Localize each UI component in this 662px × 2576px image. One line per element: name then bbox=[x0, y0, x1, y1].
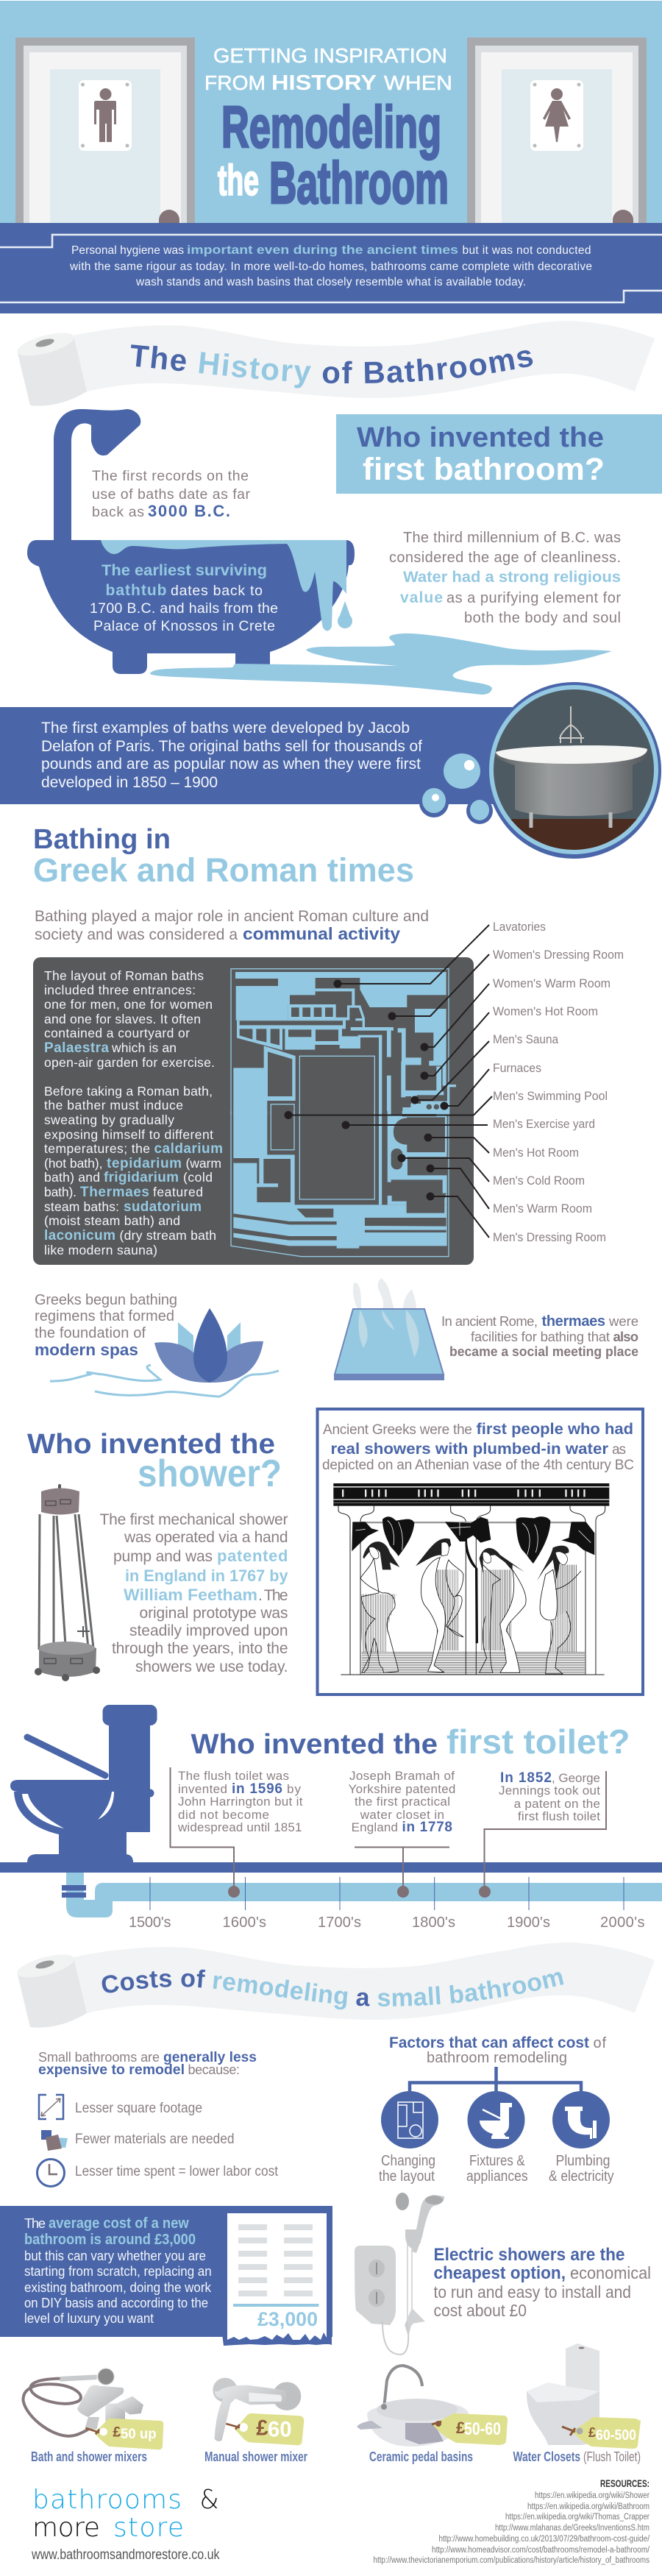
timeline labels bbox=[129, 1915, 644, 1931]
text: average cost: level of luxury you want bbox=[24, 2310, 154, 2326]
floor plan leader lines bbox=[284, 925, 492, 1238]
product: ceramic pedal basin bbox=[357, 2366, 508, 2464]
text: small bathrooms: because: bbox=[188, 2062, 240, 2077]
text: third millennium: The third millennium of B.C. was bbox=[403, 530, 621, 546]
text: joseph bramah 1778: water closet in bbox=[360, 1808, 444, 1822]
text: communal activity: society and was considered a bbox=[35, 926, 238, 943]
title: the bbox=[218, 157, 259, 205]
floor plan labels: Men's Exercise yard bbox=[493, 1118, 595, 1131]
text: layout description: contained a courtyard or bbox=[44, 1026, 190, 1040]
band: first examples of baths: The first examples of baths were developed by Jacob bbox=[41, 720, 410, 737]
heading: costs of remodeling a small bathroom: Costs of remodeling a small bathroom bbox=[102, 1969, 563, 2010]
photo: freestanding bath in oval bbox=[485, 682, 662, 859]
product: water closet: Water Closets bbox=[513, 2449, 580, 2464]
title: GETTING INSPIRATION bbox=[213, 44, 447, 67]
text: george jennings 1852: a patent on the bbox=[514, 1797, 600, 1811]
text: layout description: exposing himself to different bbox=[44, 1127, 213, 1142]
factors heading: bathroom remodeling bbox=[427, 2050, 567, 2066]
illustration: mechanical shower bbox=[35, 1484, 100, 1681]
text: joseph bramah 1778: the first practical bbox=[355, 1795, 450, 1809]
text: average cost bbox=[24, 2215, 212, 2326]
text: mechanical shower: The first mechanical shower bbox=[100, 1511, 288, 1528]
text: average cost: on DIY basis and according to the bbox=[24, 2295, 208, 2310]
floor plan labels: Men's Sauna bbox=[493, 1033, 559, 1046]
text: ancient greeks: real showers with plumbed-in water bbox=[331, 1441, 608, 1458]
floor plan labels: Men's Warm Room bbox=[493, 1202, 592, 1216]
item: lesser time spent bbox=[37, 2159, 279, 2187]
text: flush toilet 1596: did not become bbox=[178, 1808, 269, 1822]
heading: who invented the shower: shower? bbox=[138, 1452, 282, 1495]
text: flush toilet 1596: John Harrington but it bbox=[178, 1795, 303, 1809]
left door: men bbox=[15, 38, 195, 223]
text: joseph bramah 1778: England bbox=[352, 1820, 398, 1834]
text: electric showers bbox=[434, 2245, 651, 2320]
text: thermaes bbox=[441, 1313, 638, 1359]
text: layout description: (moist steam bath) and bbox=[44, 1213, 180, 1228]
timeline labels: 1500's bbox=[129, 1915, 171, 1931]
text: mechanical shower: . The bbox=[258, 1587, 288, 1604]
text: mechanical shower: pump and was bbox=[113, 1548, 213, 1565]
floor plan labels bbox=[493, 920, 624, 1244]
text: layout description: (dry stream bath bbox=[119, 1228, 216, 1243]
floor plan bbox=[231, 969, 456, 1257]
text: mechanical shower: was operated via a hand bbox=[124, 1529, 288, 1546]
resources bbox=[374, 2477, 650, 2565]
timeline labels: 1700's bbox=[318, 1915, 361, 1931]
text: flush toilet 1596: widespread until 1851 bbox=[177, 1820, 302, 1834]
text: layout description: sudatorium bbox=[124, 1199, 202, 1215]
factors heading: of bbox=[593, 2035, 606, 2051]
panel: athenian vase bbox=[318, 1409, 643, 1695]
product: bath and shower mixer bbox=[24, 2369, 163, 2464]
text: third millennium: as a purifying element for bbox=[446, 590, 621, 606]
intro text bbox=[69, 243, 592, 288]
text: mechanical shower: steadily improved upon bbox=[129, 1622, 288, 1639]
text: ancient greeks: as bbox=[612, 1442, 626, 1458]
product: bath and shower mixer: 50 up bbox=[121, 2427, 157, 2442]
text: average cost: The bbox=[24, 2215, 46, 2231]
figure robes bbox=[361, 1594, 396, 1652]
heading: who invented the first toilet: first toilet? bbox=[446, 1722, 630, 1761]
text: mechanical shower bbox=[100, 1511, 288, 1675]
band: first examples of baths: pounds and are as popular now as when they were first bbox=[41, 756, 421, 773]
bubbles bbox=[419, 753, 493, 824]
text: george jennings 1852: Jennings took out bbox=[499, 1784, 600, 1798]
text: average cost: but this can vary whether you are bbox=[24, 2248, 206, 2263]
factors tree connector bbox=[410, 2067, 581, 2091]
text: layout description: like modern sauna) bbox=[44, 1243, 157, 1257]
text: earliest bathtub: dates back to bbox=[171, 583, 263, 599]
product: water closet bbox=[513, 2343, 641, 2464]
title: Remodeling bbox=[221, 94, 441, 160]
factor: fixtures and appliances: Fixtures & bbox=[469, 2153, 525, 2169]
factor: changing the layout: Changing bbox=[381, 2153, 435, 2169]
text: first records bbox=[92, 468, 250, 520]
toilet icon bbox=[10, 1705, 157, 1862]
text: george jennings 1852: , George bbox=[552, 1771, 600, 1785]
timeline labels: 1600's bbox=[222, 1915, 266, 1931]
text: third millennium: considered the age of cleanliness. bbox=[389, 550, 621, 566]
text: flush toilet 1596: The flush toilet was bbox=[178, 1769, 289, 1783]
intro band bbox=[0, 223, 662, 313]
text: thermaes: were bbox=[608, 1313, 638, 1329]
floor plan labels: Men's Hot Room bbox=[493, 1146, 579, 1160]
text: joseph bramah 1778 bbox=[349, 1769, 455, 1835]
text: layout description: bath) and bbox=[44, 1170, 100, 1185]
illustration: vase painting bbox=[333, 1483, 609, 1675]
text: average cost: bathroom is around £3,000 bbox=[24, 2232, 196, 2248]
logo: more bbox=[32, 2513, 100, 2543]
text: flush toilet 1596: invented bbox=[178, 1782, 227, 1796]
text: greeks modern spas: the foundation of bbox=[35, 1325, 146, 1341]
text: layout description: The layout of Roman baths bbox=[44, 968, 204, 983]
text: ancient greeks: depicted on an Athenian vase of the 4th century BC bbox=[322, 1458, 634, 1473]
text: layout description: and one for slaves. It often bbox=[44, 1012, 201, 1026]
icon: lotus bbox=[50, 1308, 279, 1397]
text: layout description: caldarium bbox=[154, 1141, 223, 1157]
panel: average cost bbox=[0, 2206, 332, 2346]
text: layout description: the bather must induce bbox=[44, 1098, 183, 1113]
title bbox=[204, 44, 452, 216]
factor: changing the layout: the layout bbox=[379, 2168, 435, 2185]
title: HISTORY bbox=[271, 71, 377, 95]
text: george jennings 1852: first flush toilet bbox=[518, 1809, 600, 1823]
text: electric showers: cheapest option, bbox=[434, 2263, 566, 2283]
product: manual shower mixer: £ bbox=[256, 2416, 268, 2440]
factor: changing the layout bbox=[379, 2091, 438, 2185]
panel: who invented the first bathroom: Who invented the bbox=[357, 422, 604, 453]
text: mechanical shower: William Feetham bbox=[124, 1586, 257, 1604]
item: lesser square footage bbox=[39, 2095, 202, 2119]
text: small bathrooms: generally less bbox=[163, 2050, 257, 2065]
title: FROM bbox=[204, 71, 266, 94]
text: layout description: tepidarium bbox=[107, 1156, 182, 1171]
product: ceramic pedal basin: £ bbox=[456, 2419, 466, 2437]
text: communal activity bbox=[35, 908, 429, 943]
text: electric showers: economical bbox=[570, 2263, 651, 2282]
factor: fixtures and appliances bbox=[466, 2091, 528, 2185]
product: manual shower mixer: Manual shower mixer bbox=[204, 2449, 307, 2464]
text: george jennings 1852: In 1852 bbox=[500, 1770, 552, 1786]
text: earliest bathtub: The earliest surviving bbox=[102, 562, 267, 579]
intro text: important even during the ancient times bbox=[187, 243, 458, 257]
product: manual shower mixer: 60 bbox=[268, 2418, 292, 2442]
heading: bathing in greek and roman times bbox=[33, 824, 414, 889]
intro text: wash stands and wash basins that closely resemble what is available today. bbox=[135, 276, 526, 288]
receipt bbox=[227, 2213, 327, 2341]
text: first records: The first records on the bbox=[92, 468, 249, 484]
logo: bathrooms bbox=[32, 2485, 182, 2515]
text: flush toilet 1596 bbox=[177, 1769, 303, 1834]
text: third millennium: Water had a strong religious bbox=[403, 569, 621, 586]
factors heading: Factors that can affect cost bbox=[389, 2034, 589, 2051]
text: layout description: Thermaes bbox=[80, 1185, 149, 1200]
bathtub illustration bbox=[27, 409, 355, 674]
floor plan labels: Men's Dressing Room bbox=[493, 1231, 606, 1244]
banner: costs of remodeling bbox=[18, 1942, 655, 2028]
text: layout description: (hot bath), bbox=[44, 1156, 103, 1171]
text: layout description: Before taking a Roman bath, bbox=[44, 1084, 213, 1099]
hero background bbox=[0, 1, 662, 224]
text: greeks modern spas: modern spas bbox=[35, 1341, 138, 1359]
text: mechanical shower: through the years, into the bbox=[112, 1640, 288, 1657]
text: greeks modern spas: Greeks begun bathing bbox=[35, 1292, 177, 1308]
text: small bathrooms bbox=[38, 2050, 257, 2078]
text: average cost: average cost of a new bbox=[49, 2215, 189, 2232]
text: ancient greeks bbox=[322, 1421, 634, 1473]
product: ceramic pedal basin: 50-60 bbox=[464, 2419, 501, 2439]
heading: bathing in greek and roman times: Greek and Roman times bbox=[33, 851, 414, 889]
text: flush toilet 1596: in 1596 bbox=[232, 1781, 282, 1797]
floor plan labels: Men's Swimming Pool bbox=[493, 1090, 608, 1103]
text: layout description: included three entrances: bbox=[44, 983, 196, 998]
text: ancient greeks: first people who had bbox=[477, 1421, 633, 1438]
text: greeks modern spas: regimens that formed bbox=[35, 1308, 174, 1324]
text: layout description: frigidarium bbox=[104, 1170, 179, 1185]
text: joseph bramah 1778: in 1778 bbox=[402, 1820, 452, 1835]
text: layout description: (warm bbox=[185, 1156, 221, 1171]
intro text: Personal hygiene was bbox=[71, 244, 184, 257]
text: layout description: laconicum bbox=[44, 1228, 115, 1243]
timeline labels: 1900's bbox=[507, 1915, 550, 1931]
item: fewer materials: Fewer materials are needed bbox=[75, 2132, 235, 2147]
logo bbox=[32, 2485, 219, 2543]
text: layout description: Palaestra bbox=[44, 1040, 109, 1056]
title: WHEN bbox=[384, 71, 452, 94]
panel: who invented the first bathroom: first bathroom? bbox=[363, 452, 605, 487]
intro text: but it was not conducted bbox=[462, 244, 591, 257]
text: mechanical shower: original prototype was bbox=[140, 1605, 288, 1622]
text: george jennings 1852 bbox=[499, 1770, 600, 1823]
product: water closet: (Flush Toilet) bbox=[583, 2449, 641, 2464]
text: layout description: which is an bbox=[111, 1040, 177, 1055]
band: first examples of baths: developed in 1850 – 1900 bbox=[41, 774, 218, 791]
floor plan labels: Women's Hot Room bbox=[493, 1005, 598, 1018]
item: lesser time spent: Lesser time spent = lower labor cost bbox=[75, 2164, 279, 2179]
factor: plumbing and electricity bbox=[549, 2091, 614, 2185]
text: flush toilet 1596: by bbox=[287, 1782, 302, 1796]
heading: history of bathrooms: The History of Bathrooms bbox=[131, 344, 533, 388]
text: third millennium: value bbox=[400, 589, 443, 606]
text: third millennium: both the body and soul bbox=[464, 610, 621, 626]
factors heading bbox=[389, 2034, 606, 2066]
floor plan labels: Women's Warm Room bbox=[493, 977, 611, 990]
text: first records: 3000 B.C. bbox=[148, 502, 230, 520]
text: first records: back as bbox=[92, 504, 144, 520]
band: first examples of baths: Delafon of Paris. The original baths sell for thousands of bbox=[41, 738, 422, 755]
text: communal activity: Bathing played a major role in ancient Roman culture and bbox=[35, 908, 429, 925]
text: layout description: temperatures; the bbox=[44, 1141, 150, 1156]
text: joseph bramah 1778: Yorkshire patented bbox=[349, 1782, 455, 1796]
text: layout description: one for men, one for women bbox=[44, 997, 213, 1012]
text: mechanical shower: in England in 1767 by bbox=[125, 1566, 288, 1585]
text: earliest bathtub: Palace of Knossos in Crete bbox=[93, 618, 275, 634]
text: joseph bramah 1778: Joseph Bramah of bbox=[349, 1769, 455, 1783]
product: water closet: 60-500 bbox=[596, 2427, 636, 2444]
illustration: electric shower bbox=[355, 2193, 444, 2355]
floor plan labels: Lavatories bbox=[493, 920, 546, 934]
heading: who invented the first toilet bbox=[191, 1722, 630, 1761]
text: layout description: featured bbox=[153, 1185, 203, 1199]
timeline: pipe and floor bbox=[0, 1767, 662, 1917]
text: mechanical shower: patented bbox=[217, 1547, 288, 1565]
timeline labels: 2000's bbox=[600, 1915, 644, 1931]
logo: store bbox=[113, 2513, 184, 2543]
text: mechanical shower: showers we use today. bbox=[135, 1658, 288, 1675]
text: third millennium bbox=[389, 530, 621, 626]
text: thermaes: also bbox=[613, 1329, 638, 1344]
factor: fixtures and appliances: appliances bbox=[466, 2168, 528, 2185]
text: average cost: starting from scratch, replacing an bbox=[24, 2263, 212, 2279]
text: earliest bathtub bbox=[90, 562, 278, 634]
product: bath and shower mixer: £ bbox=[113, 2425, 121, 2441]
text: average cost: existing bathroom, doing the work bbox=[24, 2279, 212, 2295]
icon: thermae pool with steam bbox=[334, 1278, 444, 1380]
text: earliest bathtub: bathtub bbox=[106, 582, 166, 599]
heading: bathing in greek and roman times: Bathing in bbox=[33, 824, 171, 855]
text: thermaes: facilities for bathing that bbox=[471, 1329, 610, 1344]
text: thermaes: In ancient Rome, bbox=[441, 1313, 538, 1329]
floor plan labels: Men's Cold Room bbox=[493, 1174, 585, 1188]
text: layout description: open-air garden for exercise. bbox=[44, 1055, 215, 1070]
title: Bathroom bbox=[269, 150, 449, 216]
factor: plumbing and electricity: & electricity bbox=[549, 2168, 614, 2185]
heading: who invented the first toilet: Who invented the bbox=[191, 1729, 438, 1760]
panel: roman baths layout bbox=[33, 957, 474, 1265]
item: lesser square footage: Lesser square footage bbox=[75, 2101, 202, 2116]
text: layout description: bath). bbox=[44, 1185, 76, 1199]
text: greeks modern spas bbox=[35, 1292, 177, 1359]
text: electric showers: Electric showers are the bbox=[434, 2245, 625, 2265]
heading: who invented the shower: Who invented the bbox=[27, 1429, 275, 1460]
factor: plumbing and electricity: Plumbing bbox=[556, 2153, 611, 2169]
logo: & bbox=[200, 2485, 219, 2515]
right door: women bbox=[467, 38, 647, 223]
text: communal activity: communal activity bbox=[243, 924, 400, 943]
text: electric showers: cost about £0 bbox=[434, 2301, 527, 2320]
text: first records: use of baths date as far bbox=[92, 486, 250, 503]
item: fewer materials bbox=[41, 2130, 235, 2151]
water puddle bbox=[150, 634, 612, 695]
floor plan labels: Furnaces bbox=[493, 1062, 541, 1075]
receipt: £3,000 bbox=[257, 2308, 318, 2330]
text: layout description: steam baths: bbox=[44, 1199, 119, 1214]
banner: the history of bathrooms bbox=[18, 321, 655, 406]
text: small bathrooms: expensive to remodel bbox=[38, 2062, 185, 2078]
intro text: with the same rigour as today. In more well-to-do homes, bathrooms came complete with decorative bbox=[69, 260, 592, 273]
heading: who invented the shower bbox=[27, 1429, 282, 1495]
product: bath and shower mixer: Bath and shower mixers bbox=[31, 2449, 147, 2464]
product: ceramic pedal basin: Ceramic pedal basins bbox=[369, 2449, 473, 2464]
panel: who invented the first bathroom bbox=[336, 414, 662, 494]
band: first examples of baths bbox=[0, 707, 530, 804]
text: layout description: sweating by gradually bbox=[44, 1113, 174, 1127]
text: layout description: (cold bbox=[183, 1170, 213, 1185]
product: manual shower mixer bbox=[204, 2378, 307, 2464]
text: ancient greeks: Ancient Greeks were the bbox=[323, 1422, 472, 1438]
text: electric showers: to run and easy to install and bbox=[434, 2282, 631, 2302]
text: thermaes: became a social meeting place bbox=[449, 1344, 638, 1359]
text: layout description bbox=[44, 968, 223, 1257]
product: water closet: £ bbox=[588, 2425, 596, 2440]
text: thermaes: thermaes bbox=[541, 1313, 605, 1330]
floor plan labels: Women's Dressing Room bbox=[493, 948, 624, 962]
timeline labels: 1800's bbox=[412, 1915, 455, 1931]
text: earliest bathtub: 1700 B.C. and hails from the bbox=[90, 600, 278, 617]
website url: www.bathroomsandmorestore.co.uk bbox=[31, 2547, 220, 2563]
text: small bathrooms: Small bathrooms are bbox=[38, 2050, 160, 2065]
